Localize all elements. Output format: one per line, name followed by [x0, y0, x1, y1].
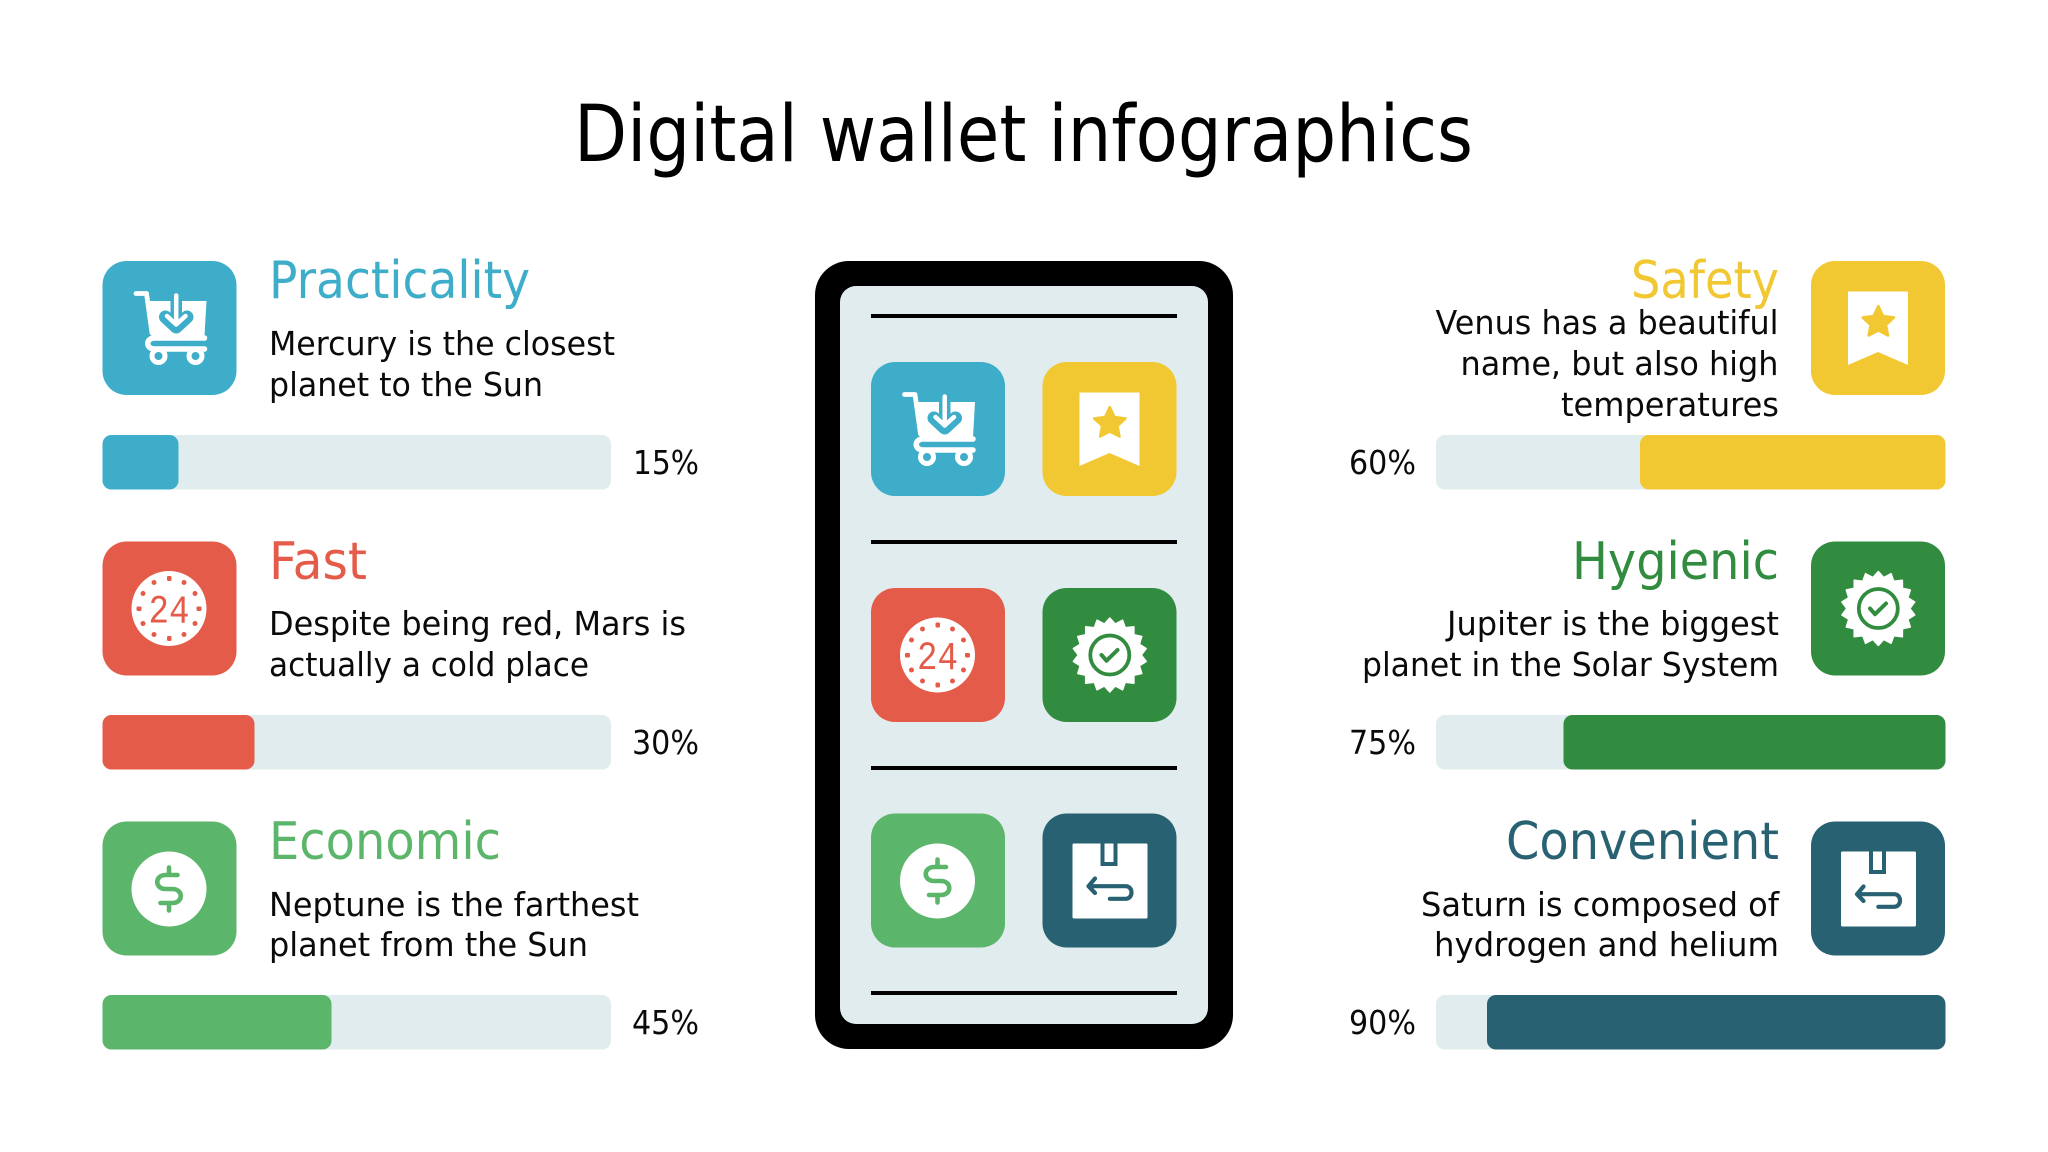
text: Safety description: [1436, 304, 1779, 424]
icon: dollar coin: [102, 822, 236, 956]
icon: shopping cart: [102, 261, 236, 395]
icon: quality badge: [1811, 542, 1945, 676]
text: Convenient description: [1421, 886, 1781, 964]
heading: Fast: Fast: [269, 532, 367, 592]
phone icon: badge: [1042, 588, 1176, 722]
phone icon: return box: [1042, 814, 1176, 948]
panel: phone: [815, 261, 1233, 1049]
panel: Convenient: [1349, 812, 1946, 1050]
panel: Fast: [102, 532, 699, 770]
value: 45%: 45%: [632, 1004, 699, 1042]
text: Hygienic description: planet in the Solar System: [1362, 646, 1779, 684]
text: Fast description: Despite being red, Mars is: [269, 605, 686, 643]
icon: bookmark star: [1811, 261, 1945, 395]
bar: 75%: [1436, 715, 1946, 770]
heading: Practicality: Practicality: [269, 251, 530, 311]
text: Convenient description: Saturn is composed of: [1421, 886, 1781, 924]
bar: 45%: [102, 995, 611, 1050]
phone icon: dollar: [871, 814, 1005, 948]
text: Practicality description: Mercury is the closest: [269, 325, 615, 363]
value: 15%: 15%: [633, 444, 699, 482]
text: Practicality description: [269, 325, 615, 404]
text: Economic description: planet from the Sun: [269, 926, 588, 964]
text: Safety description: Venus has a beautiful: [1436, 304, 1778, 342]
bar: 60%: [1436, 435, 1946, 490]
phone body: [815, 261, 1233, 1049]
text: Economic description: Neptune is the farthest: [269, 886, 639, 924]
text: Economic description: [269, 886, 639, 964]
text: Safety description: name, but also high: [1460, 345, 1778, 383]
heading: Economic: Economic: [269, 812, 501, 872]
value: 90%: 90%: [1349, 1004, 1416, 1042]
icon: return box: [1811, 822, 1945, 956]
icon: 24 hour clock: [102, 542, 236, 676]
phone screen: [840, 286, 1208, 1024]
heading: Safety: Safety: [1631, 251, 1779, 311]
text: Hygienic description: [1362, 605, 1779, 684]
text: Fast description: actually a cold place: [269, 646, 589, 684]
panel: Safety: [1349, 251, 1946, 490]
bar: 30%: [102, 715, 611, 770]
value: 60%: 60%: [1349, 444, 1416, 482]
title: Digital wallet infographics: [574, 90, 1473, 180]
bar: 90%: [1436, 995, 1946, 1050]
text: Hygienic description: Jupiter is the biggest: [1445, 605, 1779, 643]
heading: Hygienic: Hygienic: [1572, 532, 1779, 592]
value: 75%: 75%: [1349, 724, 1416, 762]
panel: Economic: [102, 812, 699, 1050]
value: 30%: 30%: [632, 724, 699, 762]
phone icon: cart: [871, 362, 1005, 496]
text: Convenient description: hydrogen and helium: [1434, 926, 1779, 964]
phone icon: bookmark star: [1042, 362, 1176, 496]
text: Safety description: temperatures: [1561, 386, 1779, 424]
panel: Hygienic: [1349, 532, 1946, 770]
text: Fast description: [269, 605, 686, 684]
panel: Practicality: [102, 251, 699, 490]
bar: 15%: [102, 435, 611, 490]
text: Practicality description: planet to the Sun: [269, 366, 543, 404]
heading: Convenient: Convenient: [1506, 812, 1779, 872]
phone icon: clock: [871, 588, 1005, 722]
